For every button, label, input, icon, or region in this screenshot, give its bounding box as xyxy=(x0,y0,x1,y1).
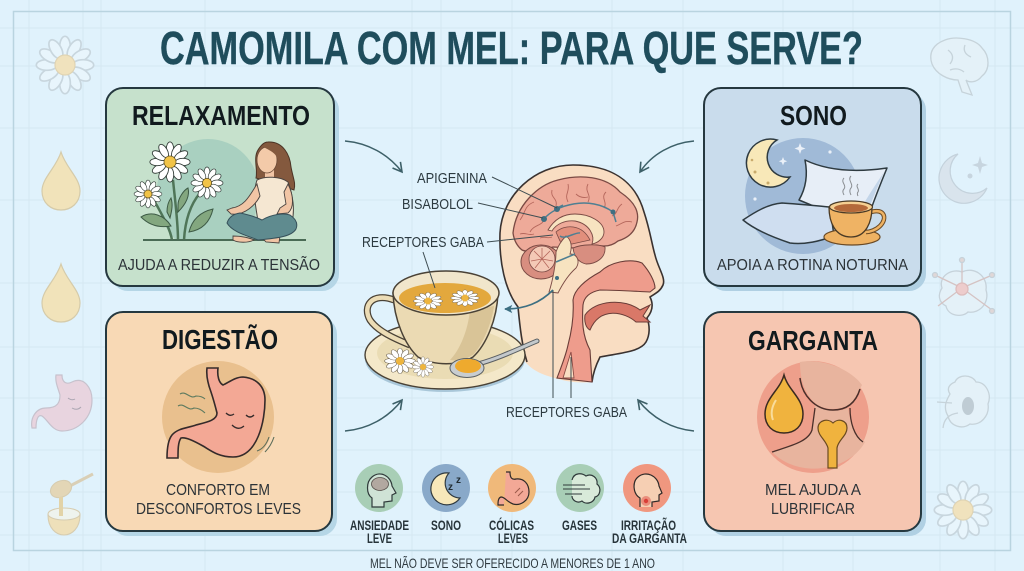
icon: side honey drop two xyxy=(42,264,80,322)
label: receptores gaba lower: RECEPTORES GABA xyxy=(506,404,627,421)
icon: side stomach xyxy=(32,375,92,431)
nasal cavity and airway xyxy=(557,261,655,382)
arrow: relaxamento to centre xyxy=(345,141,402,172)
mouth and tongue xyxy=(585,302,650,330)
illustration: daisies and meditating woman xyxy=(134,139,306,243)
label: irritação da garganta: DA GARGANTA xyxy=(612,531,687,546)
icon: gases xyxy=(556,464,604,512)
caption: second line: LUBRIFICAR xyxy=(771,501,855,518)
panel: relaxamento xyxy=(106,88,339,291)
arrow: sono to centre xyxy=(640,141,694,172)
illustration: tea cup on saucer xyxy=(365,271,537,392)
illustration: head cross-section xyxy=(500,165,664,383)
label: receptores gaba upper: RECEPTORES GABA xyxy=(362,234,484,251)
label: cólicas leves xyxy=(489,518,534,546)
label: irritação da garganta xyxy=(612,518,687,546)
label: sono: SONO xyxy=(431,518,461,533)
illustration: honey drop and throat xyxy=(757,361,869,473)
panel: garganta xyxy=(704,312,926,536)
icon: side honey jar xyxy=(48,474,93,535)
icon: ansiedade leve xyxy=(355,464,403,512)
heading: digestão: DIGESTÃO xyxy=(162,324,278,355)
panel: sono xyxy=(704,88,926,291)
heading: sono: SONO xyxy=(780,100,847,131)
label: ansiedade leve xyxy=(350,518,409,546)
caption: APOIA A ROTINA NOTURNA xyxy=(717,257,908,274)
icon row: uses xyxy=(350,464,687,546)
icon: side neural brain xyxy=(932,258,994,315)
illustration: moon, pillows and tea xyxy=(743,138,887,254)
arrow: garganta to centre xyxy=(638,400,694,431)
icon: irritação da garganta xyxy=(623,464,671,512)
label: ansiedade leve: LEVE xyxy=(367,531,392,546)
icon: cólicas leves xyxy=(488,464,536,512)
icon: sono xyxy=(422,464,470,512)
label: cólicas leves: CÓLICAS xyxy=(489,518,534,533)
label: ansiedade leve: ANSIEDADE xyxy=(350,518,409,533)
label: apigenina: APIGENINA xyxy=(417,170,487,187)
cerebellum xyxy=(521,245,561,279)
label: irritação da garganta: IRRITAÇÃO xyxy=(621,518,676,533)
icon: side gas cloud xyxy=(937,376,989,428)
caption: first line: MEL AJUDA A xyxy=(765,482,861,499)
icon: side honey drop one xyxy=(42,152,80,210)
icon: side daisy top left xyxy=(36,36,94,94)
illustration: calm stomach xyxy=(162,361,274,473)
label: cólicas leves: LEVES xyxy=(498,531,528,546)
brainstem xyxy=(549,236,578,293)
heading: relaxamento: RELAXAMENTO xyxy=(132,100,310,131)
footer warning: MEL NÃO DEVE SER OFERECIDO A MENORES DE 1 ANO xyxy=(370,555,655,571)
label: bisabolol: BISABOLOL xyxy=(402,196,473,213)
icon: side moon xyxy=(939,154,988,203)
icon: sono: z xyxy=(448,482,453,493)
caption: second line: DESCONFORTOS LEVES xyxy=(136,501,301,518)
neural pathway xyxy=(544,203,616,262)
caption: first line: CONFORTO EM xyxy=(166,482,270,499)
icon: side daisy bottom right xyxy=(934,481,992,539)
arrow: digestão to centre xyxy=(345,400,402,431)
brain xyxy=(513,177,638,251)
icon: sono: z xyxy=(456,475,461,486)
heading: garganta: GARGANTA xyxy=(748,325,878,356)
label lines xyxy=(423,177,571,398)
caption: AJUDA A REDUZIR A TENSÃO xyxy=(118,254,320,274)
label: gases: GASES xyxy=(562,518,597,533)
panel: digestão xyxy=(106,312,337,536)
icon: side brain top right xyxy=(931,38,988,95)
